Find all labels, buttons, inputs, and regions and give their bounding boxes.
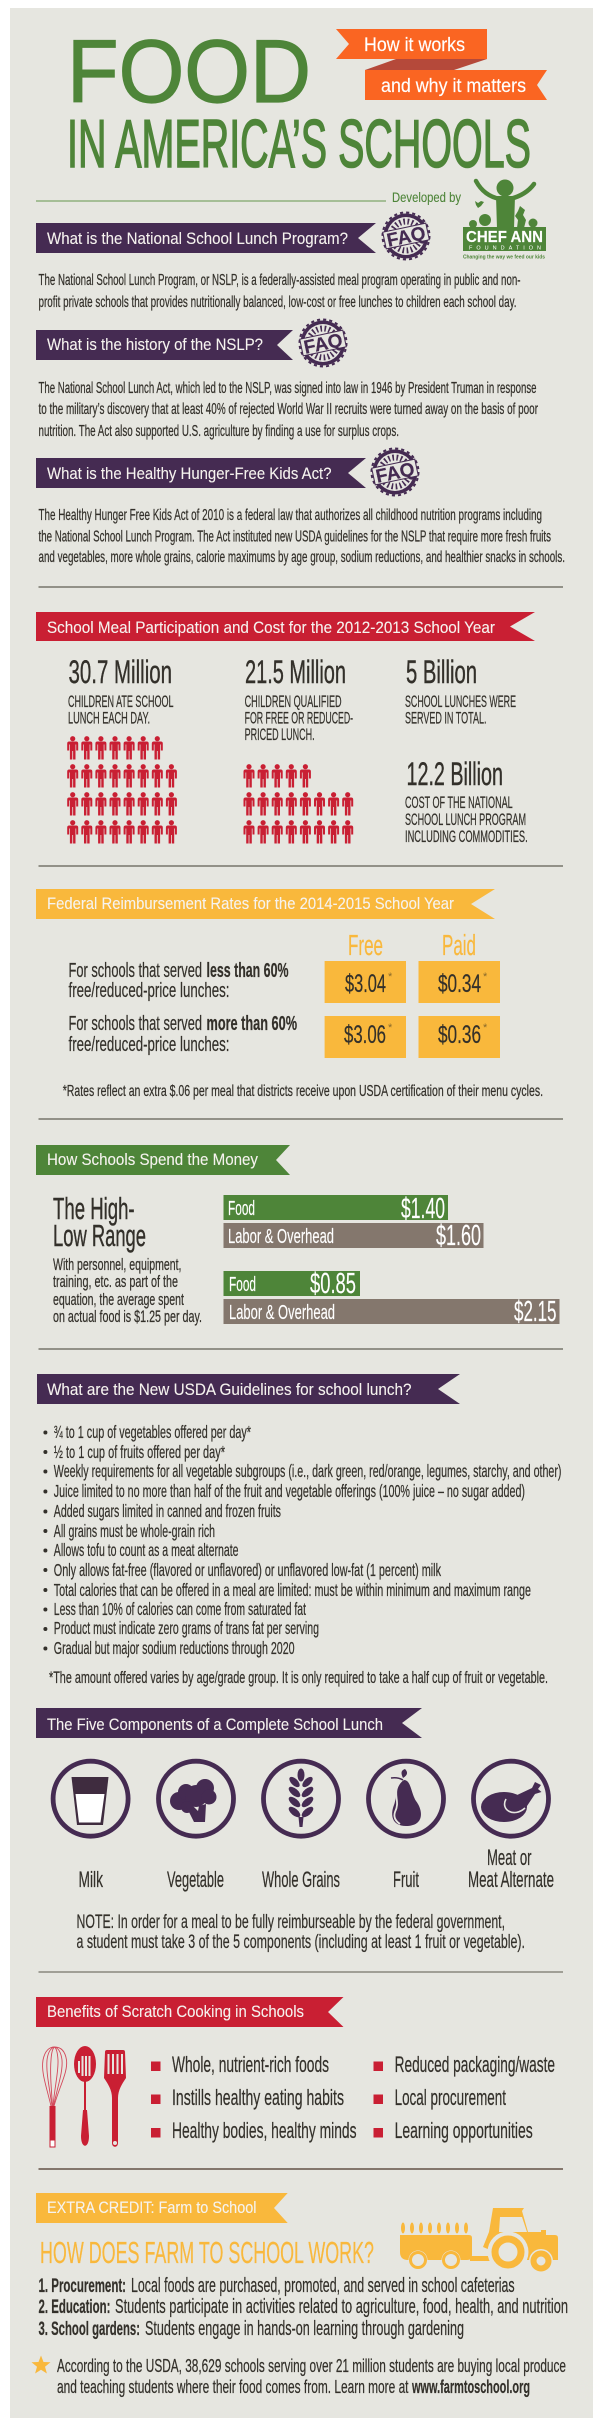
icon: whole grains bbox=[264, 1761, 338, 1836]
rate: $3.04 bbox=[325, 961, 406, 1003]
bar chart: low: $2.15 bbox=[514, 1296, 556, 1328]
bar chart: high: $1.40 bbox=[401, 1193, 445, 1225]
row: less than 60 percent bbox=[68, 960, 289, 1002]
labels: components: Meat or bbox=[487, 1845, 532, 1870]
logo: Chef Ann Foundation: CHEF ANN bbox=[466, 229, 543, 246]
logo: Chef Ann Foundation bbox=[463, 180, 546, 260]
callout: USDA statistic: and teaching students where their food comes from. Learn more at bbox=[57, 2377, 408, 2397]
banner: components bbox=[36, 1708, 422, 1738]
list: benefits column 1: Instills healthy eating habits bbox=[172, 2085, 344, 2110]
list: guidelines: Less than 10% of calories can come from saturated fat bbox=[54, 1599, 306, 1619]
bar chart: low: $0.85 bbox=[310, 1268, 356, 1300]
text: range description: on actual food is $1.25 per day. bbox=[53, 1308, 202, 1326]
rate: $0.34: $0.34 bbox=[438, 970, 481, 998]
rate: $0.34 bbox=[418, 961, 500, 1003]
section: farm to school bbox=[32, 2193, 568, 2397]
row: more than 60 percent bbox=[68, 1013, 297, 1056]
banner: national school lunch program: What is the National School Lunch Program? bbox=[47, 229, 348, 248]
list: how it works: 2. Education: bbox=[38, 2297, 110, 2318]
header bbox=[36, 21, 547, 260]
list: guidelines: Gradual but major sodium reductions through 2020 bbox=[54, 1638, 295, 1658]
icon: milk bbox=[53, 1761, 128, 1836]
banner: spend bbox=[36, 1145, 290, 1175]
list: benefits column 1: Healthy bodies, healthy minds bbox=[172, 2118, 356, 2143]
text: range description: equation, the average spent bbox=[53, 1291, 184, 1309]
stat: 21.5 million: CHILDREN QUALIFIED bbox=[245, 693, 342, 711]
stat: 30.7 million: LUNCH EACH DAY. bbox=[68, 710, 150, 728]
rate: $0.36: $0.36 bbox=[438, 1021, 481, 1049]
list: benefits column 2: Local procurement bbox=[395, 2085, 506, 2110]
section: scratch cooking bbox=[36, 1997, 555, 2147]
row: less than 60 percent: For schools that served bbox=[68, 960, 202, 982]
developed by: Developed by bbox=[392, 189, 461, 205]
icon: FAQ badge bbox=[372, 448, 419, 496]
banner: extra credit: EXTRA CREDIT: Farm to School bbox=[47, 2198, 256, 2217]
list: guidelines: ½ to 1 cup of fruits offered per day* bbox=[54, 1442, 225, 1462]
row: more than 60 percent: free/reduced-price lunches: bbox=[68, 1034, 230, 1056]
subtitle ribbon: and why it matters bbox=[381, 76, 526, 97]
list: guidelines bbox=[43, 1422, 561, 1658]
banner: benefits bbox=[36, 1997, 344, 2027]
labels: components: Milk bbox=[78, 1867, 104, 1892]
logo: Chef Ann Foundation: FOUNDATION bbox=[469, 246, 541, 252]
banner: reimbursement: Federal Reimbursement Rates for the 2014-2015 School Year bbox=[47, 894, 454, 913]
icon: vegetable bbox=[158, 1761, 234, 1836]
list: how it works: 1. Procurement: bbox=[38, 2276, 126, 2297]
rate: $0.36 bbox=[418, 1016, 500, 1058]
section: how schools spend bbox=[36, 1145, 560, 1328]
heading: high-low range bbox=[53, 1191, 146, 1253]
banner: reimbursement bbox=[36, 889, 495, 919]
stat: 12.2 billion: COST OF THE NATIONAL bbox=[405, 794, 513, 812]
bar chart: low: Food bbox=[229, 1274, 256, 1296]
icon: FAQ badge bbox=[382, 212, 430, 260]
stat: 12.2 billion: 12.2 Billion bbox=[406, 756, 503, 792]
text: NSLP definition bbox=[38, 272, 520, 311]
logo: Chef Ann Foundation: Changing the way we feed our kids bbox=[463, 254, 545, 260]
stat: 5 billion: 5 Billion bbox=[406, 654, 477, 690]
labels: components: Vegetable bbox=[167, 1867, 224, 1892]
labels: components: Fruit bbox=[393, 1867, 419, 1892]
list: guidelines: ¾ to 1 cup of vegetables offered per day* bbox=[54, 1422, 251, 1442]
list: guidelines: Product must indicate zero grams of trans fat per serving bbox=[54, 1618, 319, 1638]
icon: meat bbox=[474, 1761, 548, 1836]
stat: 12.2 billion bbox=[405, 756, 528, 846]
section: five components bbox=[36, 1708, 554, 1953]
pictogram: 21.5 million children bbox=[244, 764, 353, 844]
list: how it works bbox=[38, 2275, 568, 2340]
stat: 21.5 million bbox=[245, 654, 353, 744]
rate: $3.06: $3.06 bbox=[344, 1021, 386, 1049]
stat: 30.7 million: 30.7 Million bbox=[68, 654, 172, 690]
heading: high-low range: The High- bbox=[53, 1191, 135, 1226]
rate: $3.06: * bbox=[388, 1022, 393, 1034]
list: guidelines: All grains must be whole-grain rich bbox=[54, 1521, 215, 1541]
heading: high-low range: Low Range bbox=[53, 1218, 146, 1253]
stat: 21.5 million: 21.5 Million bbox=[245, 654, 346, 690]
banner: healthy hunger-free kids act bbox=[36, 458, 366, 488]
icon: FAQ badge bbox=[300, 320, 347, 366]
stat: 21.5 million: FOR FREE OR REDUCED- bbox=[245, 710, 353, 728]
text: range description: training, etc. as part of the bbox=[53, 1273, 178, 1291]
icon: FAQ badge: FAQ bbox=[374, 459, 417, 488]
icon: FAQ badge: FAQ bbox=[302, 330, 345, 359]
icon: whisk bbox=[43, 2047, 67, 2147]
banner: guidelines: What are the New USDA Guidelines for school lunch? bbox=[47, 1380, 412, 1399]
column heads bbox=[348, 930, 476, 962]
column heads: Paid bbox=[442, 930, 476, 962]
list: benefits column 1: Whole, nutrient-rich foods bbox=[172, 2052, 329, 2077]
row: more than 60 percent: more than 60% bbox=[206, 1013, 297, 1035]
bar chart: low bbox=[224, 1268, 560, 1328]
text: act description bbox=[38, 507, 565, 566]
bar chart: high: Food bbox=[228, 1198, 255, 1220]
banner: spend: How Schools Spend the Money bbox=[47, 1150, 258, 1169]
banner: components: The Five Components of a Complete School Lunch bbox=[47, 1715, 383, 1734]
text: range description bbox=[53, 1256, 202, 1326]
icon: FAQ badge: FAQ bbox=[385, 223, 428, 252]
rate: $0.34: * bbox=[483, 971, 488, 983]
text: history bbox=[38, 380, 538, 440]
icon: fruit bbox=[368, 1761, 444, 1836]
row: less than 60 percent: free/reduced-price lunches: bbox=[68, 980, 230, 1002]
text: history: nutrition. The Act also supported U.S. agriculture by finding a use for surplus crops. bbox=[38, 423, 399, 440]
section: USDA guidelines bbox=[37, 1374, 562, 1687]
stat: 21.5 million: PRICED LUNCH. bbox=[245, 726, 315, 744]
banner: national school lunch program bbox=[36, 223, 376, 253]
stat: 30.7 million bbox=[68, 654, 174, 728]
bar chart: low: Labor & Overhead bbox=[229, 1302, 335, 1324]
icon: tractor bbox=[400, 2208, 558, 2273]
rate: $3.06 bbox=[325, 1016, 406, 1058]
list: how it works: 3. School gardens: bbox=[38, 2319, 140, 2340]
subtitle ribbon: How it works bbox=[364, 35, 465, 56]
banner: benefits: Benefits of Scratch Cooking in Schools bbox=[47, 2002, 304, 2021]
banner: history: What is the history of the NSLP? bbox=[47, 335, 263, 354]
stat: 30.7 million: CHILDREN ATE SCHOOL bbox=[68, 693, 174, 711]
column heads: Free bbox=[348, 930, 383, 962]
rate: $3.04: * bbox=[388, 971, 393, 983]
title: FOOD: FOOD bbox=[67, 21, 311, 121]
icon: spatula bbox=[104, 2050, 126, 2147]
list: guidelines: Allows tofu to count as a meat alternate bbox=[54, 1540, 239, 1560]
banner: history bbox=[36, 330, 293, 360]
stat: 5 billion bbox=[405, 654, 516, 728]
list: benefits column 1 bbox=[151, 2052, 356, 2143]
rate: $3.04: $3.04 bbox=[345, 970, 386, 998]
list: benefits column 2 bbox=[374, 2052, 555, 2143]
row: more than 60 percent: For schools that served bbox=[68, 1013, 202, 1035]
rate: $0.36: * bbox=[483, 1022, 488, 1034]
labels: components: Whole Grains bbox=[262, 1867, 340, 1892]
stat: 5 billion: SERVED IN TOTAL. bbox=[405, 710, 486, 728]
pictogram: 30.7 million children bbox=[67, 736, 177, 844]
text: range description: With personnel, equipment, bbox=[53, 1256, 182, 1274]
labels: components bbox=[78, 1845, 554, 1892]
bar chart: high: $1.60 bbox=[436, 1220, 481, 1252]
icon: slotted spoon bbox=[74, 2046, 96, 2146]
bar chart: high: Labor & Overhead bbox=[228, 1226, 334, 1248]
banner: guidelines bbox=[37, 1374, 460, 1404]
section: reimbursement rates bbox=[36, 889, 543, 1100]
bar chart: high bbox=[224, 1193, 484, 1252]
icon: star bbox=[32, 2356, 50, 2374]
subtitle ribbon bbox=[336, 29, 547, 100]
list: guidelines: Added sugars limited in canned and frozen fruits bbox=[54, 1501, 281, 1521]
banner: extra credit bbox=[36, 2193, 288, 2223]
callout: USDA statistic bbox=[57, 2356, 566, 2397]
note bbox=[76, 1912, 525, 1953]
row: less than 60 percent: less than 60% bbox=[206, 960, 289, 982]
banner: healthy hunger-free kids act: What is the Healthy Hunger-Free Kids Act? bbox=[47, 464, 332, 483]
section: participation and cost bbox=[36, 612, 535, 846]
section: FAQ bbox=[36, 212, 565, 566]
banner: participation bbox=[36, 612, 535, 641]
banner: participation: School Meal Participation and Cost for the 2012-2013 School Year bbox=[47, 618, 495, 637]
